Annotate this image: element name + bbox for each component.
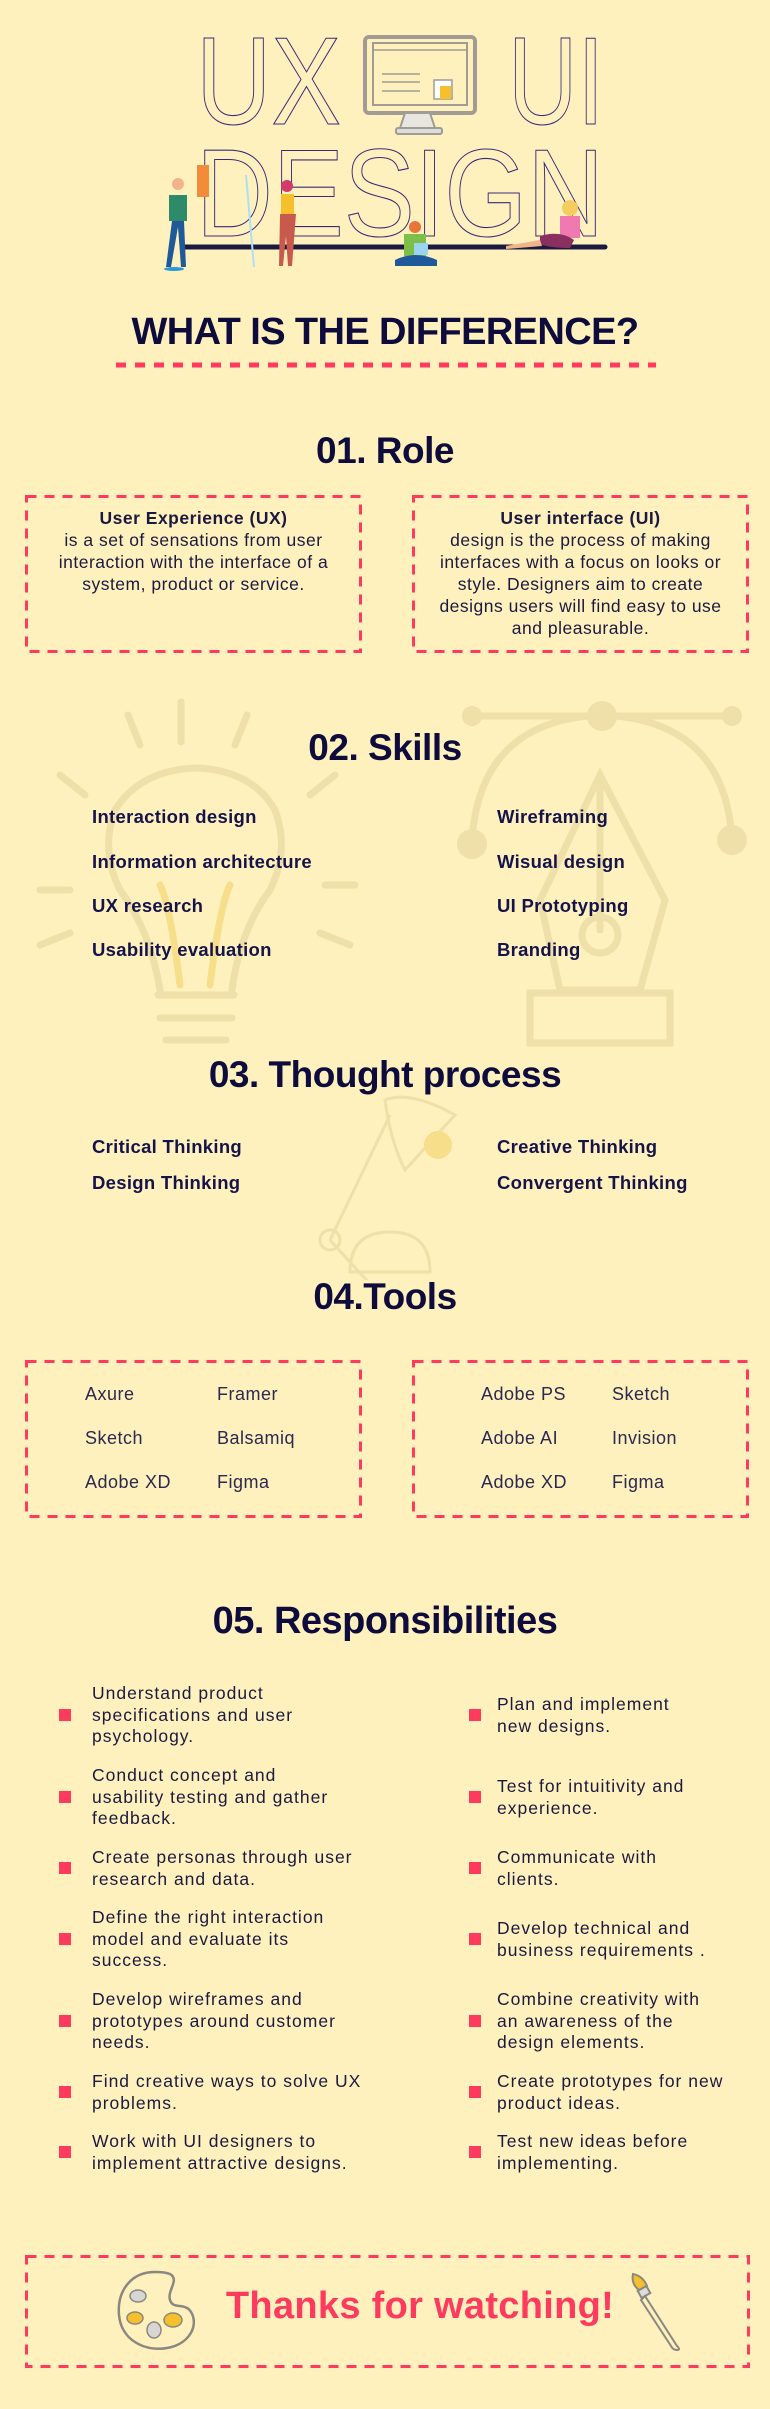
people: man with laptop (395, 221, 437, 266)
panel: UI role: style. Designers aim to create (458, 574, 703, 594)
icon: monitor (365, 37, 475, 134)
responsibilities: UI: Test new ideas before (497, 2131, 688, 2151)
responsibilities: UI: clients. (497, 1868, 559, 1888)
responsibilities: UX: Conduct concept and (92, 1765, 276, 1785)
panel: UX tools: Adobe XD (85, 1472, 171, 1492)
responsibilities: UX: implement attractive designs. (92, 2152, 348, 2172)
responsibilities: UI: implementing. (497, 2152, 619, 2172)
people: man with roller (164, 165, 209, 271)
panel: UI tools: Adobe PS (481, 1384, 566, 1404)
panel: UX tools: Axure (85, 1384, 135, 1404)
responsibilities: UX: research and data. (92, 1868, 256, 1888)
responsibilities: UX: Create personas through user (92, 1847, 352, 1867)
panel: UI role: designs users will find easy to use (439, 596, 722, 616)
thanks text: Thanks for watching! (226, 2285, 614, 2327)
heading: 04 Tools: 04.Tools (313, 1276, 457, 1317)
heading: 01 Role: 01. Role (316, 430, 454, 471)
responsibilities: UI: Combine creativity with (497, 1989, 700, 2009)
responsibilities: UI: new designs. (497, 1716, 611, 1736)
panel: UX role: system, product or service. (82, 574, 305, 594)
icon: bulb and pen background (36, 698, 747, 1046)
responsibilities: UX: Define the right interaction (92, 1907, 324, 1927)
thought list: UI: Convergent Thinking (497, 1172, 688, 1193)
responsibilities: UI: Communicate with (497, 1847, 657, 1867)
icon: palette (118, 2270, 196, 2350)
skills list: UX (92, 806, 312, 960)
responsibilities: UX: Develop wireframes and (92, 1989, 303, 2009)
heading: 03 Thought process: 03. Thought process (209, 1054, 561, 1095)
panel: UI role: design is the process of making (450, 530, 711, 550)
responsibilities: UI: product ideas. (497, 2092, 621, 2112)
skills list: UI: Wisual design (497, 851, 625, 872)
thought list: UX (92, 1136, 242, 1193)
panel: UI role: User interface (UI) (500, 508, 661, 528)
responsibilities: UX: model and evaluate its (92, 1928, 289, 1948)
panel: UX tools: Balsamiq (217, 1428, 295, 1448)
skills list: UX: Interaction design (92, 806, 257, 827)
panel: UX role: interaction with the interface of a (59, 552, 328, 572)
responsibilities: UX: Understand product (92, 1683, 264, 1703)
responsibilities: UX: problems. (92, 2092, 178, 2112)
title letters: UX: UX (196, 13, 341, 151)
responsibilities: UX: Find creative ways to solve UX (92, 2071, 361, 2091)
panel: UX tools: Sketch (85, 1428, 143, 1448)
panel: UX tools: Figma (217, 1472, 270, 1492)
panel: UX role: User Experience (UX) (100, 508, 288, 528)
heading: 05 Responsibilities: 05. Responsibilities (213, 1600, 557, 1642)
skills list: UX: Information architecture (92, 851, 312, 872)
icon: lamp background (318, 1096, 458, 1280)
title letters: DESIGN: DESIGN (196, 125, 604, 263)
thought list: UX: Critical Thinking (92, 1136, 242, 1157)
people: woman sitting (506, 200, 580, 249)
panel: thanks (25, 2255, 750, 2368)
responsibilities: UX: usability testing and gather (92, 1786, 328, 1806)
panel: UI tools: Figma (612, 1472, 665, 1492)
header illustration (164, 13, 608, 271)
responsibilities: UI: Plan and implement (497, 1694, 670, 1714)
people: woman painting (246, 175, 296, 267)
skills list: UX: Usability evaluation (92, 939, 272, 960)
panel: UI tools: Invision (612, 1428, 677, 1448)
responsibilities: UX: feedback. (92, 1808, 177, 1828)
panel: UI tools: Adobe AI (481, 1428, 558, 1448)
thought list: UX: Design Thinking (92, 1172, 240, 1193)
panel: UI tools: Adobe XD (481, 1472, 567, 1492)
responsibilities: UI (469, 1694, 723, 2172)
heading: 02 Skills: 02. Skills (308, 727, 462, 768)
panel: UX role: is a set of sensations from user (64, 530, 323, 550)
responsibilities: UI: design elements. (497, 2032, 645, 2052)
panel: UX tools (25, 1360, 362, 1518)
responsibilities: UX: success. (92, 1950, 168, 1970)
responsibilities: UI: an awareness of the (497, 2010, 674, 2030)
skills list: UI (497, 806, 629, 960)
panel: UI role: and pleasurable. (512, 618, 649, 638)
panel: UI tools (412, 1360, 749, 1518)
skills list: UI: Branding (497, 939, 581, 960)
title letters: UI: UI (508, 13, 604, 151)
panel: UX tools: Framer (217, 1384, 278, 1404)
responsibilities: UI: Develop technical and (497, 1918, 690, 1938)
panel: UI tools: Sketch (612, 1384, 670, 1404)
responsibilities: UX: Work with UI designers to (92, 2131, 316, 2151)
responsibilities: UI: business requirements . (497, 1940, 706, 1960)
responsibilities: UI: Create prototypes for new (497, 2071, 723, 2091)
skills list: UI: UI Prototyping (497, 895, 629, 916)
responsibilities: UI: experience. (497, 1798, 598, 1818)
responsibilities: UX: prototypes around customer (92, 2010, 336, 2030)
responsibilities: UX: psychology. (92, 1726, 194, 1746)
responsibilities: UI: Test for intuitivity and (497, 1776, 684, 1796)
panel: UX role (25, 495, 362, 653)
thought list: UI: Creative Thinking (497, 1136, 657, 1157)
panel: UI role (412, 495, 749, 653)
responsibilities: UX (59, 1683, 361, 2172)
skills list: UX: UX research (92, 895, 203, 916)
responsibilities: UX: needs. (92, 2032, 151, 2052)
responsibilities: UX: specifications and user (92, 1704, 293, 1724)
floor line (184, 244, 605, 250)
thought list: UI (497, 1136, 688, 1193)
icon: paintbrush (632, 2272, 680, 2351)
panel: UI role: interfaces with a focus on looks or (440, 552, 721, 572)
skills list: UI: Wireframing (497, 806, 608, 827)
subtitle: WHAT IS THE DIFFERENCE? (132, 311, 638, 353)
